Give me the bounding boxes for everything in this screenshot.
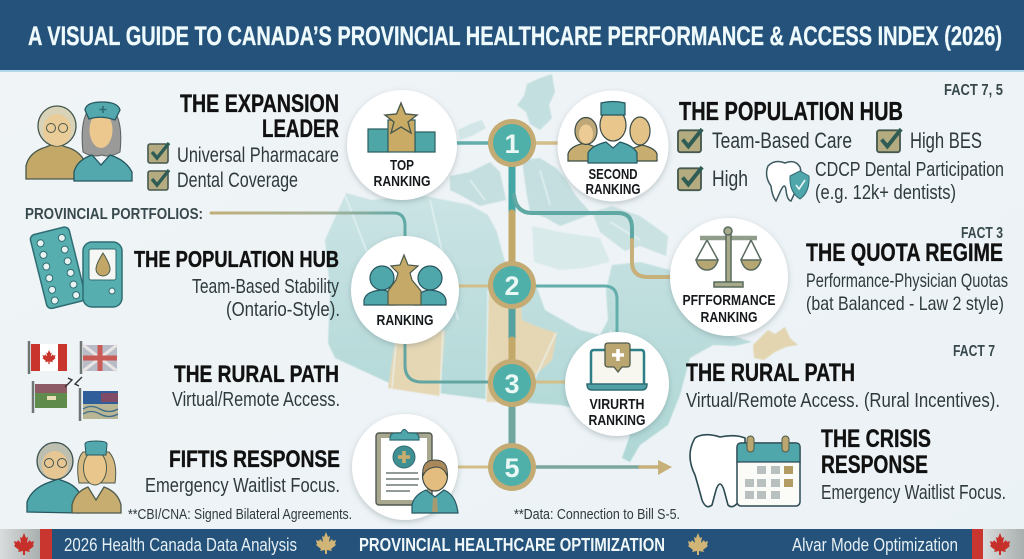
fact tag: FACT 7, 5	[944, 82, 1003, 99]
node 5: 5	[504, 453, 520, 483]
panel: the population hub left	[29, 226, 340, 321]
map of Canada	[325, 74, 798, 462]
heading: THE EXPANSION	[180, 90, 339, 118]
footer left text: 2026 Health Canada Data Analysis	[64, 535, 297, 555]
fact tag: FACT 3	[961, 225, 1003, 242]
icon: gold leaf left	[316, 532, 336, 554]
badge: performance ranking: PFΓFORMANCE	[682, 292, 776, 309]
node 3: 3	[504, 369, 520, 399]
footer centre text: PROVINCIAL HEALTHCARE OPTIMIZATION	[359, 534, 665, 555]
node 5	[488, 443, 536, 491]
panel: the expansion leader: Dental Coverage	[177, 169, 298, 192]
badge: top ranking	[347, 90, 457, 200]
badge: virtual ranking: VIRURTH	[590, 396, 644, 413]
icon: tooth and calendar	[690, 435, 800, 507]
icon: red leaf left	[14, 533, 34, 555]
panel: the rural path right	[686, 343, 1000, 412]
icon: tooth and shield	[767, 162, 809, 201]
icon: pills and glucose meter	[29, 226, 122, 309]
badge: ranking: RANKING	[376, 312, 434, 329]
heading: FIFTIS RESPONSE	[169, 446, 340, 473]
panel: the population hub right: Team-Based Care	[712, 128, 852, 153]
icon: flags	[29, 341, 118, 421]
panel: the crisis response: RESPONSE	[821, 451, 928, 479]
node 2	[488, 261, 536, 309]
node 1: 1	[504, 129, 520, 159]
panel: the population hub right: (e.g. 12k+ dentists)	[815, 182, 956, 204]
footnote: **CBI/CNA: Signed Bilateral Agreements.	[128, 507, 352, 523]
node 3	[488, 359, 536, 407]
footer banner	[0, 529, 1024, 559]
description: Team-Based Stability	[192, 276, 339, 298]
panel: the quota regime	[806, 225, 1008, 315]
icon: elder and nurse	[27, 441, 121, 513]
badge: second ranking	[558, 90, 668, 202]
badge: virtual ranking: RANKING	[588, 412, 646, 429]
heading: THE RURAL PATH	[174, 361, 339, 388]
heading: THE CRISIS	[821, 425, 931, 453]
panel: the population hub right: High	[712, 166, 748, 191]
panel: the expansion leader	[26, 90, 339, 192]
panel: the population hub left: (Ontario-Style).	[226, 299, 340, 321]
badge: top ranking: RANKING	[374, 173, 430, 190]
node 2: 2	[504, 271, 520, 301]
panel: the expansion leader: LEADER	[262, 115, 339, 143]
badge: virtual ranking	[565, 332, 669, 436]
icon: red leaf right	[990, 533, 1010, 555]
panel: the population hub right: High BES	[910, 128, 982, 153]
checklist	[678, 129, 702, 152]
badge: second ranking: RANKING	[586, 181, 640, 198]
node 1	[488, 119, 536, 167]
badge: performance ranking	[670, 218, 788, 336]
footnote: data: **Data: Connection to Bill S-5.	[514, 507, 680, 523]
description: Emergency Waitlist Focus.	[145, 475, 340, 497]
badge: ranking	[351, 236, 459, 344]
heading: THE POPULATION HUB	[679, 96, 903, 126]
footer right text: Alvar Mode Optimization	[792, 535, 958, 555]
connector network	[211, 143, 672, 467]
panel: the crisis response	[690, 425, 1006, 507]
fact tag: FACT 7	[953, 343, 995, 360]
icon: gold leaf right	[688, 533, 708, 555]
heading: THE POPULATION HUB	[134, 246, 339, 272]
header banner	[0, 0, 1024, 72]
label: provincial portfolios: PROVINCIAL PORTFOLIOS:	[25, 206, 203, 223]
checklist	[148, 143, 169, 163]
panel: the expansion leader: Universal Pharmacare	[177, 144, 339, 167]
panel: fiftis response	[27, 441, 352, 523]
description: Virtual/Remote Access.	[172, 389, 340, 411]
badge: second ranking: SECOND	[588, 166, 638, 183]
panel: the rural path left	[29, 341, 340, 421]
icon: elder and nurse	[26, 102, 132, 181]
badge: clipboard and doctor	[352, 414, 458, 520]
tan provinces	[388, 288, 798, 402]
badge: top ranking: TOP	[390, 157, 414, 174]
badge: performance ranking: RANKING	[700, 309, 758, 326]
panel: the population hub right	[678, 82, 1004, 204]
arrow head	[658, 460, 672, 475]
heading: THE RURAL PATH	[686, 359, 855, 387]
